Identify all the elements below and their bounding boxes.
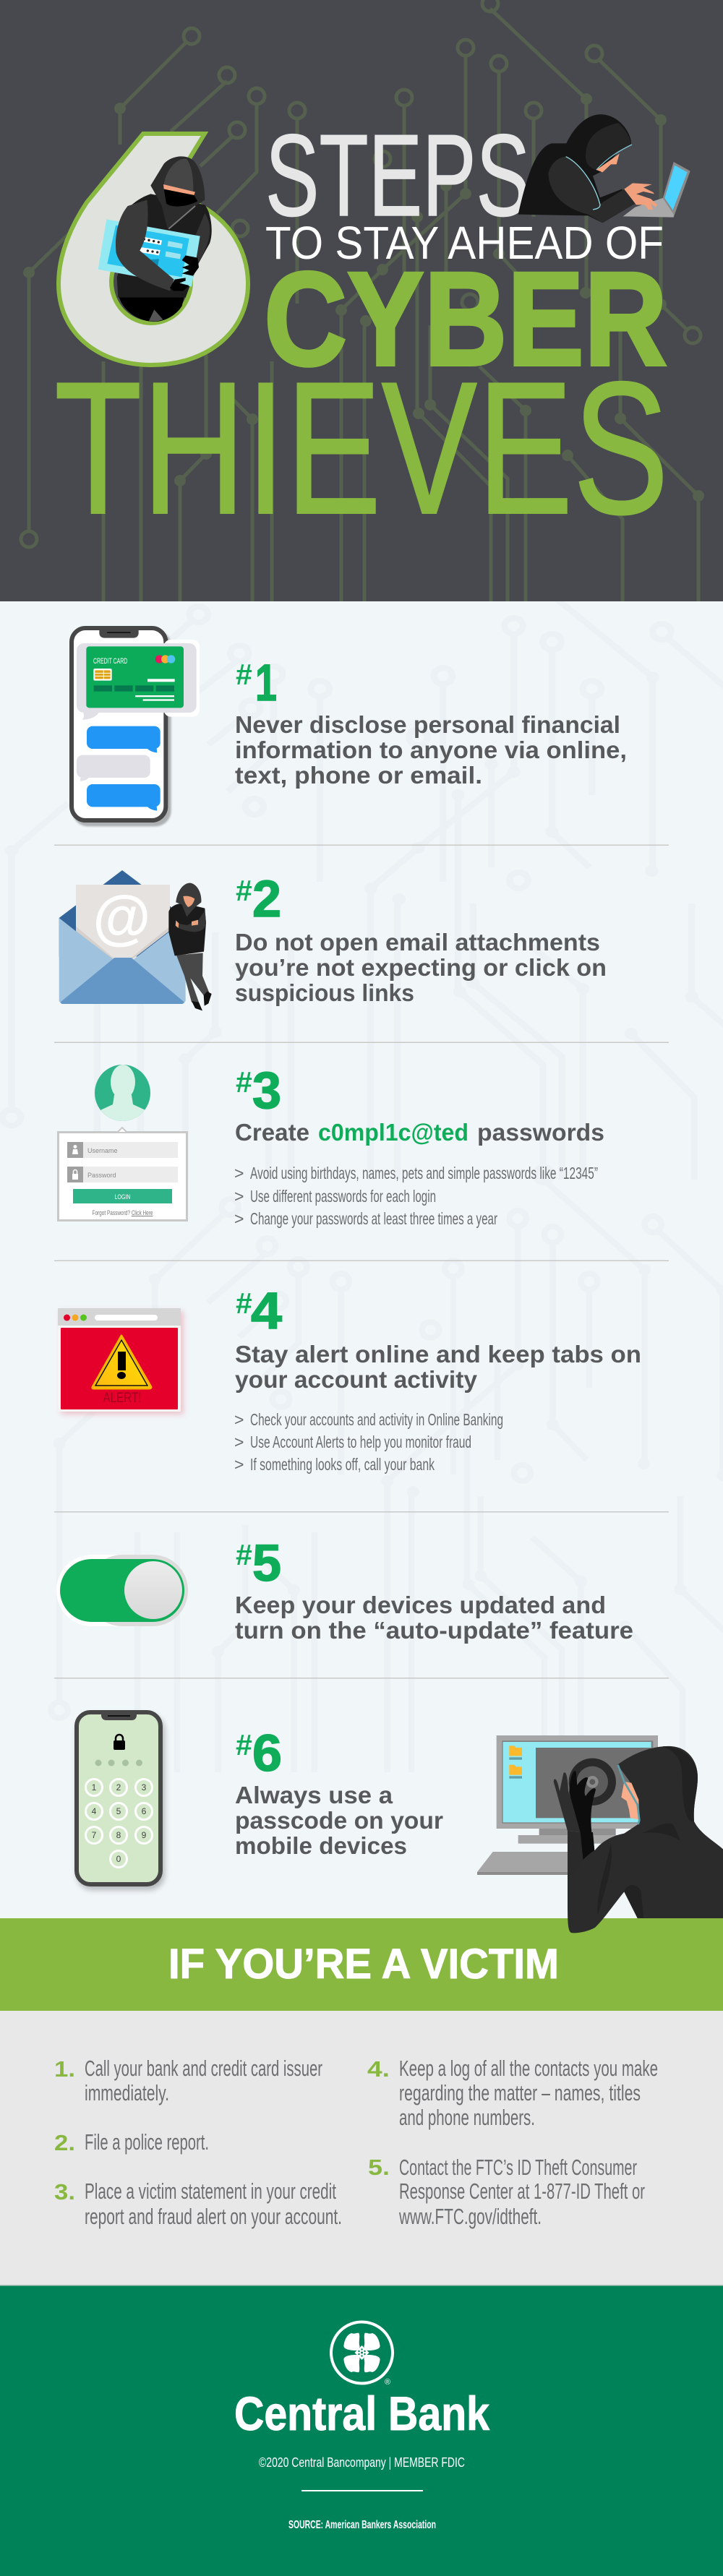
step 5 text: turn on the “auto-update” feature <box>235 1617 633 1644</box>
computer monitor and keyboard <box>477 1735 658 1875</box>
step 4 panel <box>58 1283 641 1474</box>
icon: email envelope with leaning thief <box>59 870 212 1010</box>
victim step 2: 2. <box>54 2130 75 2155</box>
step 2 text: suspicious links <box>235 979 414 1006</box>
step number 4 <box>236 1283 283 1340</box>
icon: locked phone with keypad: 8 <box>116 1830 121 1840</box>
step 4 bullets: Use Account Alerts to help you monitor fraud <box>250 1433 471 1451</box>
victim step 4: and phone numbers. <box>399 2105 535 2130</box>
icon: locked phone with keypad: 0 <box>116 1854 121 1864</box>
step 2 text <box>235 929 607 1006</box>
step 6 text: passcode on your <box>235 1807 443 1834</box>
step number 1 <box>236 655 277 712</box>
big number 6 <box>59 134 248 365</box>
icon: hooded thief holding credit card <box>98 156 212 322</box>
step 4 bullets: If something looks off, call your bank <box>250 1455 435 1474</box>
victim step 5 <box>368 2155 645 2229</box>
logo wordmark: Central Bank <box>234 2387 489 2440</box>
step 4 bullets: Check your accounts and activity in Online Banking <box>250 1410 503 1429</box>
step number 2 <box>236 871 281 928</box>
step 3 heading: Create <box>235 1119 309 1146</box>
step number 3 <box>236 1062 281 1120</box>
heading: to stay ahead of: TO STAY AHEAD OF <box>265 217 664 269</box>
step 4 heading <box>235 1341 641 1393</box>
step 1 text <box>235 711 627 789</box>
heading: if you're a victim: IF YOU’RE A VICTIM <box>168 1941 559 1988</box>
step number 3: # <box>236 1065 252 1099</box>
icon: login form with avatar <box>58 1065 187 1220</box>
victim step 1: Call your bank and credit card issuer <box>85 2056 322 2081</box>
victim banner <box>0 1918 723 2011</box>
victim step 1: 1. <box>54 2056 75 2082</box>
step 1 text: text, phone or email. <box>235 762 482 789</box>
footer panel <box>0 2285 723 2576</box>
step 3 heading: passwords <box>477 1119 604 1146</box>
victim step 2: File a police report. <box>85 2129 209 2155</box>
step 4 bullets: > <box>234 1410 244 1429</box>
victim step 3: 3. <box>54 2179 75 2204</box>
header panel <box>0 0 723 601</box>
step 2 text: Do not open email attachments <box>235 929 600 956</box>
step number 5: # <box>236 1538 252 1571</box>
icon: locked phone with keypad: 6 <box>142 1806 147 1816</box>
victim step 3: Place a victim statement in your credit <box>85 2178 336 2204</box>
heading: STEPS: STEPS <box>265 111 530 241</box>
step number 2: 2 <box>252 871 281 928</box>
step 5 panel <box>56 1535 633 1644</box>
victim step 4: 4. <box>367 2056 390 2082</box>
icon: browser alert window <box>58 1308 184 1414</box>
step number 4: # <box>236 1287 252 1320</box>
victim step 5: www.FTC.gov/idtheft. <box>398 2204 542 2229</box>
icon: login form with avatar: LOGIN <box>114 1193 130 1201</box>
logo: flower emblem <box>331 2322 393 2387</box>
victim step 2 <box>54 2129 209 2155</box>
step number 5: 5 <box>252 1535 281 1592</box>
icon: locked phone with keypad: 2 <box>116 1782 121 1793</box>
step 3 bullets: Change your passwords at least three times a year <box>250 1209 497 1228</box>
step number 3: 3 <box>252 1062 281 1120</box>
icon: locked phone with keypad: 7 <box>92 1830 97 1840</box>
step 1 text: Never disclose personal financial <box>235 711 620 738</box>
step number 1: 1 <box>255 655 277 712</box>
icon: locked phone with keypad: 1 <box>92 1782 97 1793</box>
icon: login form with avatar: Forgot Password? Click Here <box>93 1209 153 1216</box>
step 3 heading <box>235 1119 604 1146</box>
step 3 panel <box>58 1062 604 1228</box>
step number 6: # <box>236 1728 252 1761</box>
step 3 bullets: > <box>234 1187 244 1206</box>
step 6 text: mobile devices <box>235 1832 407 1859</box>
step number 6 <box>236 1725 282 1782</box>
victim step 5: 5. <box>368 2155 390 2180</box>
icon: phone with credit card message <box>72 628 200 826</box>
step 1 panel <box>72 628 627 826</box>
copyright line: ©2020 Central Bancompany | MEMBER FDIC <box>259 2455 465 2470</box>
source line: SOURCE: American Bankers Association <box>288 2519 436 2531</box>
step 3 bullets: Use different passwords for each login <box>250 1187 436 1206</box>
step 3 bullets: > <box>234 1164 244 1182</box>
icon: locked phone with keypad: 4 <box>92 1806 97 1816</box>
icon: browser alert window: ALERT! <box>103 1391 142 1406</box>
step 3 heading: c0mpl1c@ted <box>318 1119 469 1146</box>
victim step 4 <box>367 2056 658 2130</box>
icon: login form with avatar: Password <box>87 1172 116 1179</box>
victim step 1 <box>54 2056 322 2105</box>
step number 6: 6 <box>252 1725 282 1782</box>
title <box>54 111 690 554</box>
victim steps panel <box>0 2011 723 2285</box>
icon: hooded thief at laptop <box>518 114 690 223</box>
step 5 text: Keep your devices updated and <box>235 1592 606 1618</box>
step 6 panel <box>77 1712 443 1890</box>
victim step 3 <box>54 2178 342 2229</box>
step 4 heading: your account activity <box>235 1366 478 1393</box>
icon: locked phone with keypad: 3 <box>142 1782 147 1793</box>
icon: phone with credit card message: CREDIT CARD <box>93 657 127 666</box>
victim step 1: immediately. <box>85 2080 169 2105</box>
step 6 text <box>235 1782 443 1859</box>
light panel background <box>0 574 723 1923</box>
icon: locked phone with keypad: 5 <box>116 1806 121 1816</box>
step 4 bullets: > <box>234 1433 244 1451</box>
step number 2: # <box>236 874 252 907</box>
step 4 bullets <box>234 1410 503 1474</box>
icon: locked phone with keypad <box>77 1712 165 1890</box>
step 5 text <box>235 1592 633 1644</box>
icon: toggle switch <box>56 1555 188 1626</box>
step number 4: 4 <box>251 1283 283 1340</box>
icon: locked phone with keypad: 9 <box>142 1830 147 1840</box>
icon: login form with avatar: Username <box>87 1147 118 1154</box>
step 3 bullets <box>234 1164 598 1228</box>
logo: flower emblem: ® <box>385 2378 390 2387</box>
icon: email envelope with leaning thief: @ <box>93 883 150 950</box>
step 3 bullets: > <box>234 1209 244 1228</box>
victim step 3: report and fraud alert on your account. <box>85 2204 342 2229</box>
step 6 text: Always use a <box>235 1782 393 1808</box>
step 1 text: information to anyone via online, <box>235 737 627 763</box>
step number 1: # <box>236 658 252 691</box>
illustration: thief cracking a computer safe <box>477 1735 723 1933</box>
step number 5 <box>236 1535 281 1592</box>
step 4 bullets: > <box>234 1455 244 1474</box>
step 2 text: you’re not expecting or click on <box>235 954 607 981</box>
step 2 panel <box>59 870 607 1010</box>
hooded figure <box>554 1746 723 1933</box>
heading: cyber: CYBER <box>264 245 667 394</box>
step 4 heading: Stay alert online and keep tabs on <box>235 1341 641 1368</box>
